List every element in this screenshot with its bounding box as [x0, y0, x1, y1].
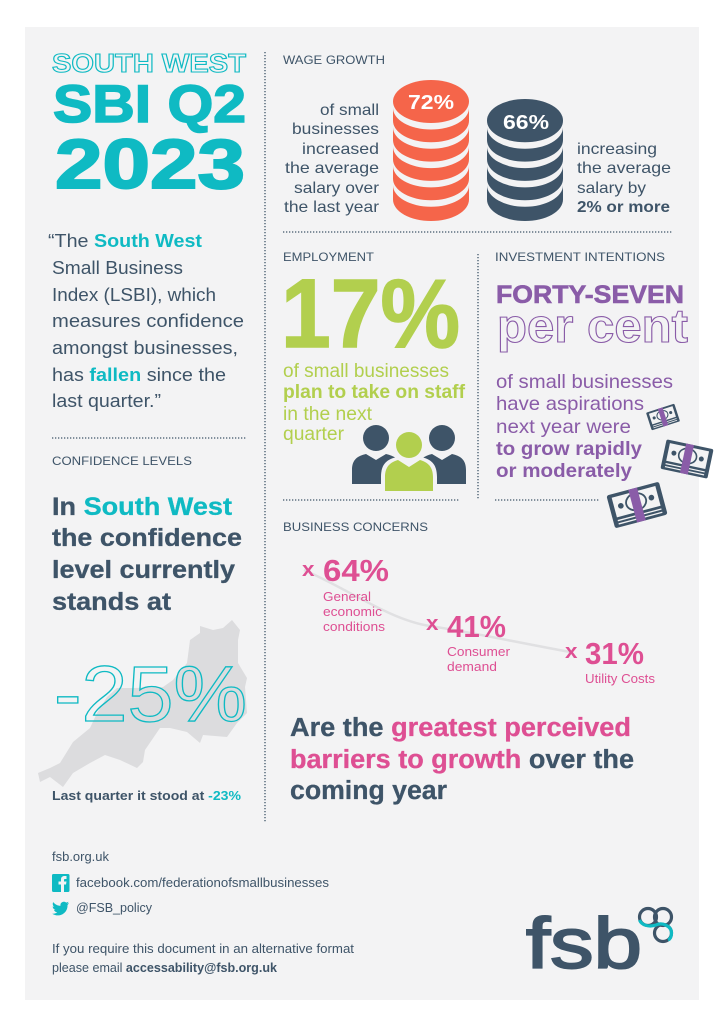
concern: 41% consumer demand: x [426, 613, 438, 635]
concern: 41% consumer demand [426, 609, 510, 674]
trend line [304, 570, 570, 652]
icon: small banknotes [646, 404, 680, 430]
employment text: of small businesses [283, 361, 449, 382]
left wage text: the last year [284, 199, 380, 216]
investment text [496, 371, 673, 482]
footer contact details [52, 850, 355, 975]
right wage text [577, 141, 671, 216]
coin stack: 66% [487, 99, 563, 221]
panel: business concerns [283, 520, 655, 805]
footer contact details: If you require this document in an alternative format [52, 942, 355, 956]
quote text block: “The South West [48, 230, 202, 251]
forty-seven: FORTY-SEVEN [496, 281, 684, 309]
barriers statement: coming year [290, 777, 447, 805]
big figure: -25%: -25% [54, 649, 247, 738]
fsb logo [526, 905, 672, 984]
concern: 41% consumer demand: Consumer [447, 645, 510, 659]
concern: 41% consumer demand: 41% [447, 609, 506, 644]
left wage text: increased [302, 141, 379, 158]
concern: 31% utility costs: x [565, 641, 578, 663]
panel: confidence levels [38, 454, 247, 803]
right wage text: the average [577, 160, 671, 177]
per cent: per cent [497, 299, 688, 352]
right wage text: salary by [577, 180, 646, 197]
investment text: have aspirations [496, 393, 644, 415]
logo rings [640, 908, 672, 942]
concern: 64% general economic conditions: General [323, 590, 371, 604]
icon: twitter [52, 902, 69, 915]
quote text block [48, 230, 244, 411]
title [52, 48, 246, 203]
footer contact details: please email accessability@fsb.org.uk [52, 961, 277, 975]
barriers statement: barriers to growth over the [290, 746, 634, 774]
investment text: of small businesses [496, 371, 673, 393]
quote text block: amongst businesses, [52, 337, 238, 358]
quote text block: measures confidence [52, 310, 244, 331]
last quarter note: Last quarter it stood at -23% [52, 788, 241, 803]
barriers statement: Are the greatest perceived [290, 714, 631, 742]
panel: investment intentions [495, 250, 714, 528]
heading: wage growth: WAGE GROWTH [283, 53, 385, 67]
left wage text: salary over [294, 180, 380, 197]
concern: 64% general economic conditions: x [302, 559, 314, 581]
employment text [283, 361, 466, 445]
footer contact details: fsb.org.uk [52, 850, 110, 864]
quote text block: Small Business [52, 257, 183, 278]
investment text: next year were [496, 416, 631, 438]
concern: 31% utility costs: Utility Costs [585, 672, 655, 686]
panel: wage growth [283, 53, 671, 221]
panel: employment [281, 250, 466, 492]
right wage text: increasing [577, 141, 657, 158]
confidence statement: level currently [52, 556, 235, 584]
big figure: 17%: 17% [281, 259, 460, 368]
barriers statement [290, 714, 634, 805]
concern: 31% utility costs [565, 636, 655, 686]
concern: 64% general economic conditions: conditions [323, 620, 385, 634]
employment text: plan to take on staff [283, 382, 466, 403]
employment text: quarter [283, 424, 345, 445]
quote text block: Index (LSBI), which [52, 284, 216, 305]
title: SBI Q2 [53, 75, 246, 134]
icon: large banknotes [606, 482, 668, 528]
concern: 64% general economic conditions [302, 553, 389, 634]
left wage text: of small [320, 102, 379, 119]
concern: 41% consumer demand: demand [447, 660, 497, 674]
coin stack: 72% [393, 80, 469, 221]
footer contact details: facebook.com/federationofsmallbusinesses [76, 876, 329, 890]
heading: business concerns: BUSINESS CONCERNS [283, 520, 428, 534]
coin stack: 66%: 66% [503, 112, 549, 134]
title: 2023 [55, 125, 245, 203]
fsb logo: fsb [526, 905, 642, 984]
heading: employment: EMPLOYMENT [283, 250, 375, 264]
left wage text: businesses [292, 121, 379, 138]
investment text: or moderately [496, 460, 632, 482]
confidence statement: In South West [52, 493, 233, 521]
icon: medium banknotes [660, 439, 714, 479]
quote text block: has fallen since the [52, 364, 226, 385]
title: SOUTH WEST [52, 48, 246, 78]
icon: people [352, 425, 466, 492]
footer contact details: @FSB_policy [76, 901, 153, 915]
confidence statement: the confidence [52, 524, 242, 552]
confidence statement: stands at [52, 588, 172, 616]
heading: confidence levels: CONFIDENCE LEVELS [52, 454, 192, 468]
confidence statement [52, 493, 242, 616]
left wage text [284, 102, 380, 216]
map of south west england [38, 620, 247, 787]
employment text: in the next [283, 404, 373, 425]
concern: 31% utility costs: 31% [585, 636, 644, 671]
icon: facebook [52, 874, 70, 892]
right wage text: 2% or more [577, 199, 670, 216]
concern: 64% general economic conditions: 64% [323, 553, 389, 588]
heading: investment intentions: INVESTMENT INTENTIONS [495, 250, 665, 264]
investment text: to grow rapidly [496, 438, 642, 460]
left wage text: the average [285, 160, 379, 177]
concern: 64% general economic conditions: economic [323, 605, 382, 619]
quote text block: last quarter.” [52, 390, 161, 411]
coin stack: 72%: 72% [408, 92, 454, 114]
